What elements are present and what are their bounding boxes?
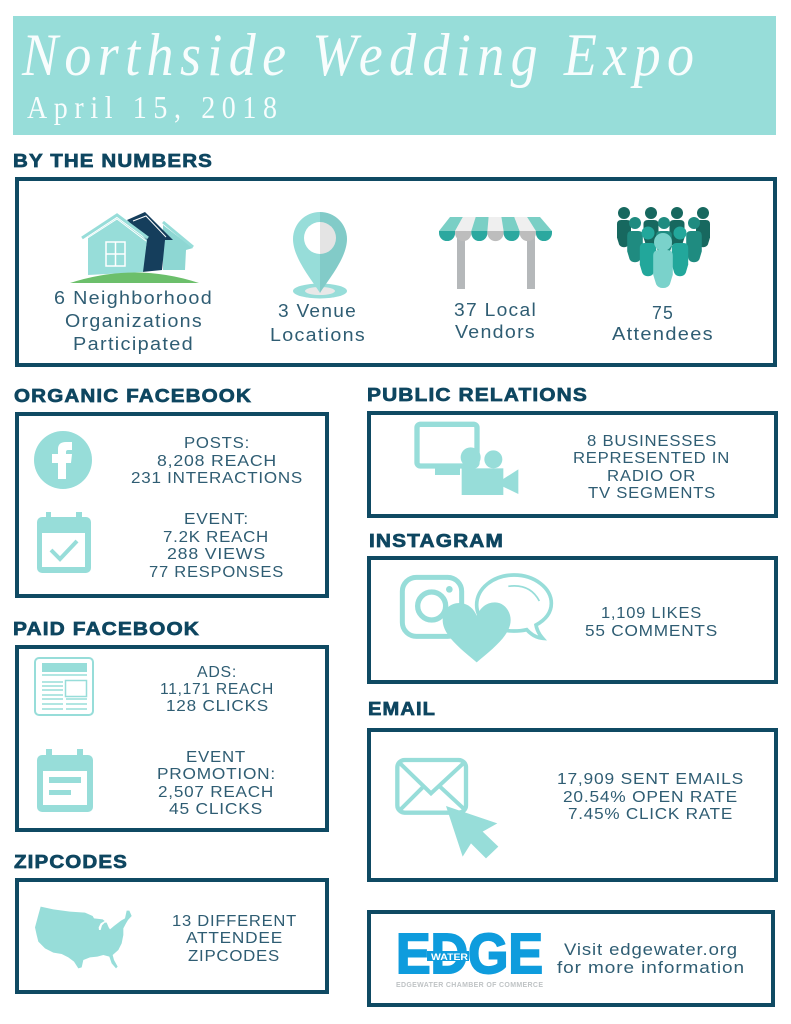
text: neighborhood organizations: 6 Neighborhood xyxy=(54,288,213,308)
text: local vendors: Vendors xyxy=(455,322,536,342)
text: event promotion: EVENT xyxy=(186,749,246,766)
heading: instagram: INSTAGRAM xyxy=(369,530,504,551)
text: neighborhood organizations xyxy=(54,288,213,354)
text: venue locations: Locations xyxy=(270,325,366,345)
text: likes and comments: 1,109 LIKES xyxy=(601,605,702,622)
heading: email: EMAIL xyxy=(368,698,436,719)
panel: zipcodes xyxy=(17,880,327,992)
icon: calendar check xyxy=(37,512,91,573)
text: ads: 11,171 REACH xyxy=(160,681,274,698)
text: businesses: REPRESENTED IN xyxy=(573,450,730,467)
text: visit website xyxy=(557,940,745,977)
text: businesses: 8 BUSINESSES xyxy=(587,433,717,450)
panel: by the numbers xyxy=(17,179,775,365)
text: neighborhood organizations: Participated xyxy=(73,334,194,354)
text: posts: 231 INTERACTIONS xyxy=(131,470,303,487)
text: neighborhood organizations: Organizations xyxy=(65,311,203,331)
title banner xyxy=(13,16,776,135)
text: event xyxy=(149,511,284,581)
text: visit website: for more information xyxy=(557,958,745,977)
text: event: 288 VIEWS xyxy=(167,546,266,563)
icon: vendor awning xyxy=(439,217,552,289)
text: local vendors xyxy=(454,300,537,342)
text: email stats: 20.54% OPEN RATE xyxy=(563,789,738,806)
text: email stats xyxy=(557,771,744,823)
text: event promotion: PROMOTION: xyxy=(157,766,276,783)
icon: newspaper xyxy=(35,658,93,715)
logo: edgewater chamber of commerce: EDGEWATER CHAMBER OF COMMERCE xyxy=(396,982,543,989)
text: attendees: 75 xyxy=(652,303,674,323)
icon: crowd of people xyxy=(617,207,710,288)
text: posts: POSTS: xyxy=(184,435,250,452)
text: attendee zipcodes: 13 DIFFERENT xyxy=(172,913,297,930)
logo: edgewater chamber of commerce: EDGE xyxy=(396,922,543,986)
heading: zipcodes: ZIPCODES xyxy=(14,851,128,872)
text: posts xyxy=(131,435,303,487)
icon: usa map xyxy=(35,907,132,968)
text: email stats: 7.45% CLICK RATE xyxy=(568,806,733,823)
icon: location pin xyxy=(293,212,347,298)
text: ads: 128 CLICKS xyxy=(166,698,269,715)
panel: public relations xyxy=(369,413,776,516)
heading: organic facebook: ORGANIC FACEBOOK xyxy=(14,385,252,406)
icon: calendar xyxy=(37,749,93,812)
text: event promotion: 2,507 REACH xyxy=(158,784,274,801)
text: event promotion: 45 CLICKS xyxy=(169,801,263,818)
panel: footer xyxy=(369,912,773,1005)
text: venue locations: 3 Venue xyxy=(278,301,357,321)
icon: houses xyxy=(70,212,199,283)
icon: facebook xyxy=(34,431,92,489)
heading: public relations: PUBLIC RELATIONS xyxy=(367,384,588,405)
text: event promotion xyxy=(157,749,276,818)
text: likes and comments xyxy=(585,605,718,640)
panel: email xyxy=(369,730,776,880)
text: attendees xyxy=(612,303,714,344)
icon: instagram, heart and speech bubble xyxy=(402,575,551,662)
title: Northside Wedding Expo xyxy=(21,22,694,89)
icon: tv and camera xyxy=(417,424,518,495)
text: attendee zipcodes: ATTENDEE xyxy=(186,930,283,947)
logo: edgewater chamber of commerce: WATER xyxy=(431,952,468,963)
text: email stats: 17,909 SENT EMAILS xyxy=(557,771,744,788)
text: businesses xyxy=(573,433,730,502)
panel: instagram xyxy=(369,558,776,682)
text: visit website: Visit edgewater.org xyxy=(564,940,738,959)
text: event: 77 RESPONSES xyxy=(149,564,284,581)
text: posts: 8,208 REACH xyxy=(157,453,277,470)
heading: paid facebook: PAID FACEBOOK xyxy=(13,618,200,639)
icon: envelope and cursor xyxy=(397,760,498,858)
text: ads: ADS: xyxy=(197,664,237,681)
text: venue locations xyxy=(270,301,366,345)
text: attendee zipcodes: ZIPCODES xyxy=(188,948,280,965)
panel: paid facebook xyxy=(17,647,327,830)
text: event: EVENT: xyxy=(184,511,249,528)
text: businesses: TV SEGMENTS xyxy=(588,485,716,502)
panel: organic facebook xyxy=(17,414,327,596)
text: likes and comments: 55 COMMENTS xyxy=(585,623,718,640)
text: local vendors: 37 Local xyxy=(454,300,537,320)
text: businesses: RADIO OR xyxy=(607,468,696,485)
text: ads xyxy=(160,664,274,715)
text: attendee zipcodes xyxy=(172,913,297,965)
heading: by the numbers: BY THE NUMBERS xyxy=(13,150,213,171)
text: event: 7.2K REACH xyxy=(163,529,269,546)
text: attendees: Attendees xyxy=(612,324,714,344)
date: April 15, 2018 xyxy=(27,89,277,125)
